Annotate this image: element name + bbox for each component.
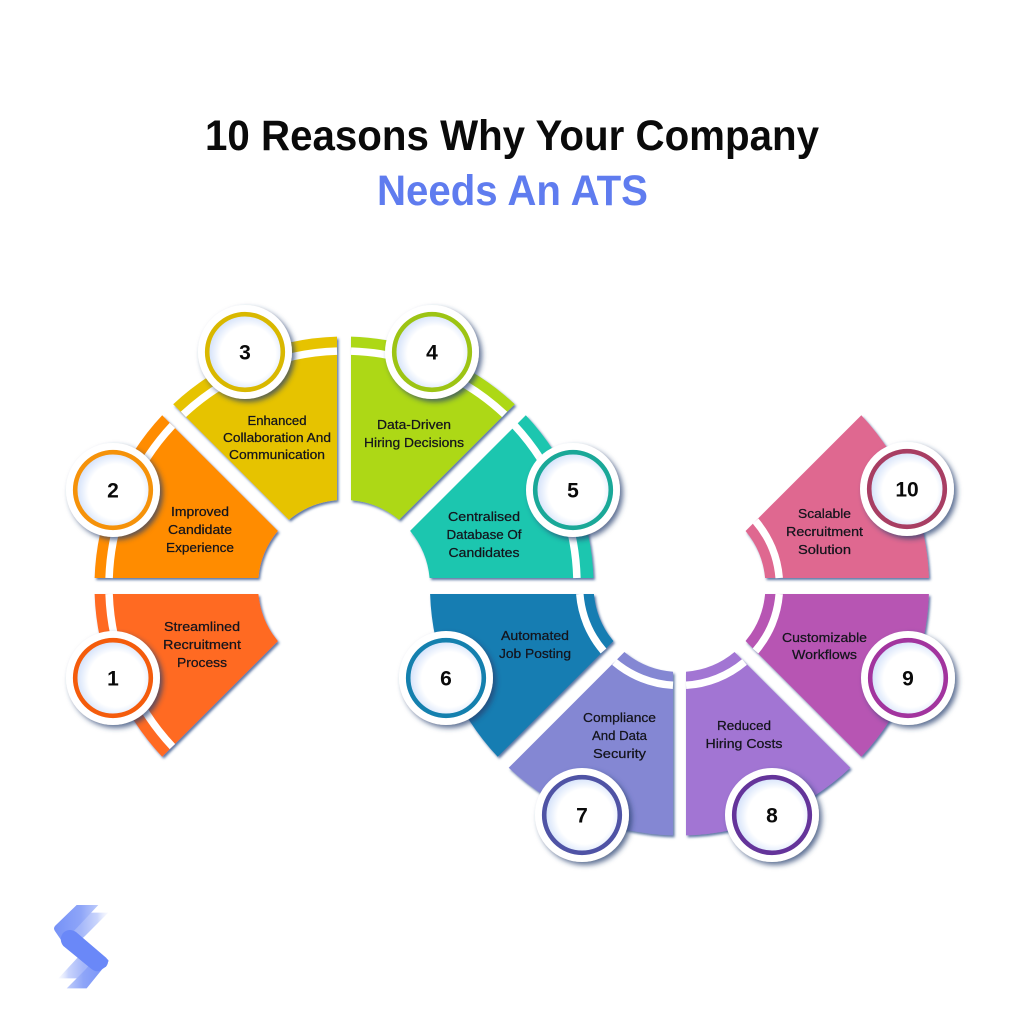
title: Needs An ATS bbox=[377, 167, 648, 215]
panel: reason 6 bbox=[399, 594, 613, 757]
label 3: Communication bbox=[229, 447, 325, 462]
label 10: Solution bbox=[798, 542, 851, 557]
label 5 bbox=[446, 509, 522, 560]
label 8: Reduced bbox=[717, 718, 771, 733]
label 1: Process bbox=[177, 655, 227, 670]
label 7: And Data bbox=[592, 728, 648, 743]
panel: reason 2 bbox=[66, 415, 278, 578]
label 9: Workflows bbox=[792, 647, 857, 662]
label 10: Recruitment bbox=[786, 524, 863, 539]
label 2: Candidate bbox=[168, 522, 232, 537]
label 3 bbox=[223, 413, 331, 462]
segment shape 3 bbox=[173, 337, 337, 520]
label 5: Database Of bbox=[446, 527, 522, 542]
label 2: Improved bbox=[171, 504, 229, 519]
label 3: Enhanced bbox=[248, 413, 306, 428]
badge 3 bbox=[198, 305, 292, 399]
panel: reason 9 bbox=[746, 594, 955, 757]
stripe 3 bbox=[183, 351, 337, 414]
label 4: Hiring Decisions bbox=[364, 435, 464, 450]
badge 1 bbox=[66, 631, 160, 725]
badge 8 bbox=[725, 768, 819, 862]
badge 8: 8 bbox=[766, 804, 778, 828]
label 4: Data-Driven bbox=[377, 417, 451, 432]
badge 3: 3 bbox=[239, 342, 251, 364]
stripe 2 bbox=[109, 425, 172, 578]
badge 4 bbox=[385, 305, 479, 399]
label 7: Compliance bbox=[583, 710, 656, 725]
stripe 8 bbox=[686, 662, 744, 685]
panel: reason 10 bbox=[746, 415, 954, 578]
label 6: Job Posting bbox=[499, 646, 571, 661]
badge 2 bbox=[66, 443, 160, 537]
stripe 10 bbox=[756, 521, 779, 578]
segment shape 5 bbox=[410, 415, 593, 578]
label 6: Automated bbox=[501, 628, 569, 643]
badge 10: 10 bbox=[895, 478, 919, 502]
label 6 bbox=[499, 628, 571, 661]
stripe 1 bbox=[109, 594, 172, 747]
label 7: Security bbox=[593, 746, 646, 761]
segment shape 4 bbox=[351, 337, 515, 520]
segment shape 2 bbox=[95, 415, 278, 578]
label 1 bbox=[163, 619, 241, 670]
stripe 7 bbox=[614, 662, 673, 685]
badge 10 bbox=[860, 442, 954, 536]
segment shape 1 bbox=[95, 594, 278, 757]
label 2: Experience bbox=[166, 540, 234, 555]
badge 9 bbox=[861, 631, 955, 725]
label 7 bbox=[583, 710, 656, 761]
badge 6: 6 bbox=[440, 668, 452, 690]
badge 4: 4 bbox=[426, 342, 438, 364]
badge 5: 5 bbox=[567, 480, 579, 502]
label 10 bbox=[786, 506, 863, 557]
title: 10 Reasons Why Your Company bbox=[205, 112, 819, 160]
label 8: Hiring Costs bbox=[706, 736, 783, 751]
stripe 5 bbox=[515, 425, 577, 578]
badge 6 bbox=[399, 631, 493, 725]
icon: company logo bbox=[54, 905, 109, 988]
segment shape 10 bbox=[746, 415, 929, 578]
panel: reason 8 bbox=[686, 652, 850, 862]
label 8 bbox=[706, 718, 783, 751]
label 10: Scalable bbox=[798, 506, 851, 521]
panel: reason 5 bbox=[410, 415, 620, 578]
badge 5 bbox=[526, 443, 620, 537]
panel: reason 3 bbox=[173, 305, 337, 520]
badge 1: 1 bbox=[107, 668, 119, 690]
label 9: Customizable bbox=[782, 630, 867, 645]
label 4 bbox=[364, 417, 464, 450]
panel: reason 7 bbox=[509, 652, 673, 862]
label 5: Candidates bbox=[448, 545, 520, 560]
panel: reason 1 bbox=[66, 594, 278, 757]
stripe 9 bbox=[756, 594, 779, 651]
label 2 bbox=[166, 504, 234, 555]
panel: reason 4 bbox=[351, 305, 515, 520]
segment shape 9 bbox=[746, 594, 929, 757]
label 3: Collaboration And bbox=[223, 430, 331, 445]
badge 9: 9 bbox=[902, 668, 914, 690]
label 9 bbox=[782, 630, 867, 662]
stripe 6 bbox=[580, 594, 604, 651]
title bbox=[205, 112, 819, 215]
badge 7 bbox=[535, 768, 629, 862]
stripe 4 bbox=[351, 351, 505, 414]
badge 2: 2 bbox=[107, 480, 119, 502]
label 5: Centralised bbox=[448, 509, 520, 524]
badge 7: 7 bbox=[576, 804, 588, 828]
segment shape 6 bbox=[430, 594, 613, 757]
label 1: Recruitment bbox=[163, 637, 241, 652]
label 1: Streamlined bbox=[164, 619, 240, 634]
segment shape 7 bbox=[509, 652, 673, 835]
segment shape 8 bbox=[686, 652, 850, 835]
